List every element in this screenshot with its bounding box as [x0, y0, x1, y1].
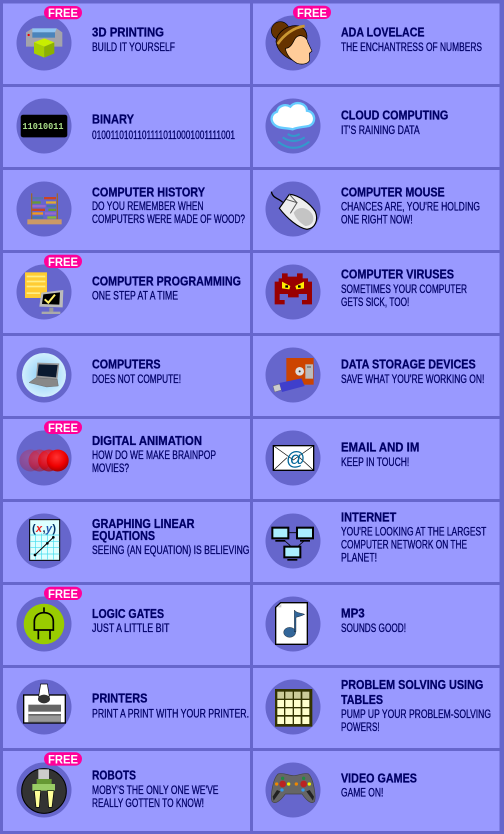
- heading: 3D PRINTING: [92, 24, 164, 40]
- icon: cloud: [266, 98, 320, 154]
- icon: abacus: [16, 182, 72, 236]
- description: ONE STEP AT A TIME: [92, 291, 178, 303]
- icon: animated red balls: [16, 430, 72, 486]
- heading: [92, 516, 195, 543]
- panel: Digital Animation: [3, 419, 250, 499]
- icon: binary display: 11010011: [22, 121, 64, 132]
- description: GETS SICK, TOO!: [341, 297, 409, 309]
- icon: networked computers: [266, 514, 320, 568]
- panel: Problem Solving Using Tables: [253, 668, 500, 748]
- icon: envelope: @: [286, 449, 305, 470]
- panel: Email and IM: [253, 419, 500, 499]
- heading: COMPUTER MOUSE: [341, 184, 445, 199]
- badge: free: FREE: [48, 753, 78, 767]
- heading: EMAIL AND IM: [341, 440, 419, 455]
- icon: laptop: [16, 348, 72, 402]
- heading: [341, 677, 483, 707]
- panel: Video Games: [253, 751, 500, 831]
- description: GAME ON!: [341, 788, 383, 800]
- description: BUILD IT YOURSELF: [92, 42, 175, 54]
- badge: free: FREE: [48, 6, 78, 20]
- heading: GRAPHING LINEAR: [92, 516, 195, 531]
- panel: Printers: [3, 668, 250, 748]
- description: COMPUTERS WERE MADE OF WOOD?: [92, 214, 245, 226]
- panel: Cloud Computing: [253, 87, 500, 167]
- icon: music file: [266, 596, 320, 652]
- description: JUST A LITTLE BIT: [92, 623, 170, 635]
- panel: Binary: [3, 87, 250, 167]
- description: PRINT A PRINT WITH YOUR PRINTER.: [92, 709, 249, 721]
- panel: Logic Gates: [3, 585, 250, 665]
- description: MOBY'S THE ONLY ONE WE'VE: [92, 785, 219, 797]
- description: [341, 527, 486, 565]
- icon: Ada Lovelace portrait: [266, 16, 320, 70]
- description: 01001101011011110110001001111001: [92, 130, 235, 142]
- heading: BINARY: [92, 112, 134, 127]
- icon: 3D printer: [16, 16, 72, 70]
- description: [341, 201, 480, 226]
- panel: Computer Mouse: [253, 170, 500, 250]
- panel: Robots: [3, 751, 250, 831]
- description: MOVIES?: [92, 463, 129, 475]
- heading: COMPUTER HISTORY: [92, 184, 205, 200]
- panel: 3D Printing: [3, 4, 250, 84]
- heading: ADA LOVELACE: [341, 25, 425, 40]
- description: [92, 785, 219, 810]
- icon: robot claw: [16, 762, 72, 818]
- badge: free: FREE: [48, 421, 78, 435]
- panel: Computer Viruses: [253, 253, 500, 333]
- description: SEEING (AN EQUATION) IS BELIEVING: [92, 545, 250, 557]
- panel: Data Storage Devices: [253, 336, 500, 416]
- heading: VIDEO GAMES: [341, 771, 417, 786]
- description: ONE RIGHT NOW!: [341, 214, 413, 226]
- badge: free: FREE: [48, 255, 78, 269]
- icon: mouse: [266, 182, 320, 236]
- icon: coordinate graph: (x,y): [32, 523, 56, 535]
- badge: free: FREE: [48, 587, 78, 601]
- heading: DIGITAL ANIMATION: [92, 433, 202, 448]
- heading: INTERNET: [341, 509, 396, 524]
- icon: coordinate graph: [16, 514, 72, 568]
- heading: EQUATIONS: [92, 528, 155, 543]
- heading: DATA STORAGE DEVICES: [341, 357, 476, 372]
- heading: TABLES: [341, 692, 383, 707]
- panel: Computer Programming: [3, 253, 250, 333]
- description: SOUNDS GOOD!: [341, 623, 406, 635]
- panel: Computer History: [3, 170, 250, 250]
- heading: COMPUTER PROGRAMMING: [92, 274, 241, 289]
- panel: Graphing Linear Equations: [3, 502, 250, 582]
- icon: logic gate: [16, 596, 72, 652]
- heading: COMPUTER VIRUSES: [341, 267, 454, 282]
- heading: MP3: [341, 606, 365, 621]
- description: IT'S RAINING DATA: [341, 125, 420, 137]
- panel: Internet: [253, 502, 500, 582]
- description: DOES NOT COMPUTE!: [92, 374, 181, 386]
- icon: binary display: [16, 98, 72, 154]
- panel: Computers: [3, 336, 250, 416]
- icon: envelope: [266, 430, 320, 486]
- description: POWERS!: [341, 722, 380, 734]
- description: KEEP IN TOUCH!: [341, 457, 409, 469]
- description: [92, 201, 245, 226]
- icon: code page and monitor: [16, 264, 72, 320]
- icon: game controller: [266, 762, 320, 818]
- badge: free: FREE: [297, 6, 327, 20]
- icon: floppy and USB drive: [266, 348, 320, 402]
- icon: virus invader: [266, 264, 320, 320]
- description: HOW DO WE MAKE BRAINPOP: [92, 450, 216, 462]
- description: [92, 450, 216, 475]
- heading: CLOUD COMPUTING: [341, 108, 448, 123]
- heading: LOGIC GATES: [92, 606, 164, 621]
- icon: table grid: [266, 680, 320, 734]
- heading: PRINTERS: [92, 691, 148, 706]
- heading: ROBOTS: [92, 767, 136, 782]
- description: PLANET!: [341, 553, 377, 565]
- panel: MP3: [253, 585, 500, 665]
- description: [341, 709, 491, 734]
- description: DO YOU REMEMBER WHEN: [92, 201, 204, 213]
- description: REALLY GOTTEN TO KNOW!: [92, 798, 204, 810]
- heading: COMPUTERS: [92, 357, 161, 372]
- icon: printer: [16, 680, 72, 734]
- description: [341, 284, 467, 309]
- panel: Ada Lovelace: [253, 4, 500, 84]
